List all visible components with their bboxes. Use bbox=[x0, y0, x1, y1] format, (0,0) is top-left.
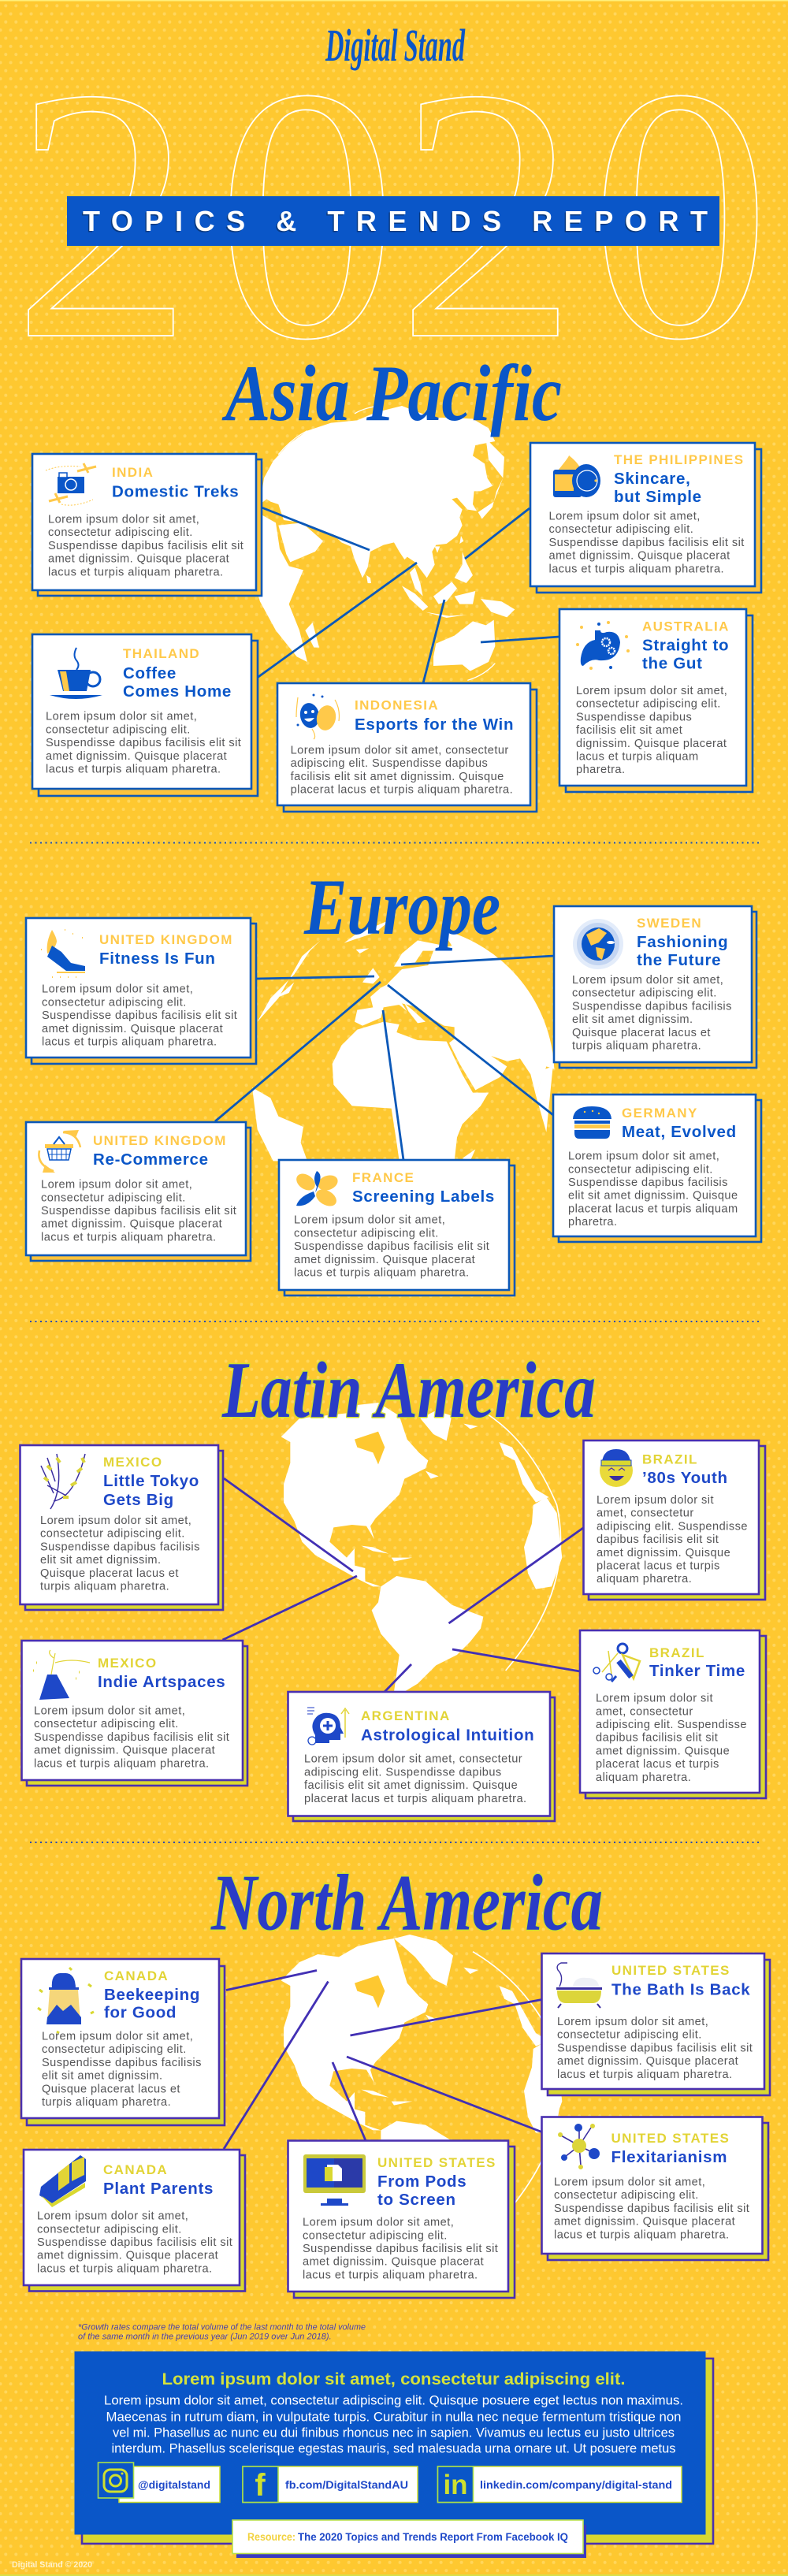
body text: Lorem ipsum dolor sit amet, bbox=[48, 514, 199, 526]
body text: consectetur adipiscing elit. bbox=[548, 523, 693, 536]
body text: Lorem ipsum dolor sit amet, bbox=[40, 1515, 191, 1527]
icon: craft tools bbox=[593, 1644, 640, 1682]
trend title: Coffee bbox=[123, 664, 177, 682]
country label: UNITED STATES bbox=[611, 2131, 730, 2146]
body text: Quisque placerat lacus et bbox=[42, 2083, 180, 2095]
heading: Europe: Europe bbox=[303, 863, 500, 952]
social: Instagram: @digitalstand bbox=[138, 2478, 210, 2491]
body text: Suspendisse dapibus facilisis elit sit bbox=[46, 737, 241, 749]
footer body text: interdum. Phasellus scelerisque egestas mauris, sed malesuada urna ornare ut. Ut posuere metus bbox=[112, 2441, 676, 2456]
trend title: Flexitarianism bbox=[611, 2148, 727, 2166]
panel: Argentina bbox=[288, 1692, 555, 1821]
trend title: Comes Home bbox=[123, 682, 232, 701]
body text: placerat lacus et turpis aliquam pharetra. bbox=[304, 1793, 527, 1805]
body text: Lorem ipsum dolor sit amet, consectetur bbox=[304, 1753, 522, 1766]
body text: Lorem ipsum dolor sit amet, bbox=[568, 1150, 719, 1163]
body text: Quisque placerat lacus et bbox=[572, 1027, 711, 1039]
outlined year 2020: 2020 bbox=[13, 15, 771, 414]
body text: facilisis elit sit amet bbox=[576, 724, 682, 737]
country label: BRAZIL bbox=[642, 1452, 698, 1467]
icon: head with plus sign bbox=[307, 1708, 349, 1745]
social: Facebook: fb.com/DigitalStandAU bbox=[285, 2478, 408, 2491]
footer body text: vel mi. Phasellus ac nunc eu dui finibus rhoncus nec in sapien. Vivamus eu lectus eu justo ultrices bbox=[113, 2425, 675, 2440]
panel: The Philippines bbox=[530, 443, 761, 593]
body text: Lorem ipsum dolor sit amet, consectetur bbox=[291, 744, 509, 756]
body text: amet dignissim. Quisque bbox=[597, 1547, 730, 1559]
trend title: but Simple bbox=[614, 488, 702, 506]
icon: basket with arrows bbox=[39, 1130, 80, 1173]
globe: North America bbox=[281, 1935, 562, 2214]
country label: ARGENTINA bbox=[361, 1708, 451, 1723]
body text: amet dignissim. Quisque placerat bbox=[557, 2055, 738, 2068]
panel: Brazil, '80s Youth bbox=[583, 1440, 765, 1600]
body text: Lorem ipsum dolor sit amet, bbox=[576, 685, 727, 697]
body text: placerat lacus et turpis bbox=[597, 1560, 720, 1573]
country label: MEXICO bbox=[103, 1455, 162, 1470]
trend title: Plant Parents bbox=[103, 2180, 214, 2198]
body text: Quisque placerat lacus et bbox=[40, 1567, 179, 1580]
trend title: for Good bbox=[104, 2003, 177, 2022]
body text: Lorem ipsum dolor sit amet, bbox=[548, 511, 701, 523]
body text: Suspendisse dapibus bbox=[576, 711, 692, 723]
icon: plant branches bbox=[41, 1454, 85, 1509]
body text: Suspendisse dapibus facilisis elit sit bbox=[42, 1009, 237, 1022]
body text: lacus et turpis aliquam pharetra. bbox=[554, 2228, 730, 2241]
body text: pharetra. bbox=[568, 1216, 617, 1229]
icon: desktop monitor bbox=[303, 2154, 366, 2206]
connector lines: Asia Pacific bbox=[256, 507, 559, 683]
body text: placerat lacus et turpis aliquam pharetra. bbox=[291, 783, 513, 796]
body text: Suspendisse dapibus facilisis elit sit bbox=[303, 2243, 498, 2255]
body text: adipiscing elit. Suspendisse bbox=[597, 1520, 748, 1533]
body text: amet dignissim. Quisque placerat bbox=[303, 2256, 484, 2269]
body text: consectetur adipiscing elit. bbox=[37, 2223, 182, 2236]
country label: GERMANY bbox=[622, 1106, 698, 1121]
body text: amet dignissim. Quisque placerat bbox=[294, 1254, 475, 1266]
trend title: Straight to bbox=[642, 637, 729, 654]
panel: United States, From Pods to Screen bbox=[288, 2140, 515, 2298]
body text: lacus et turpis aliquam pharetra. bbox=[303, 2269, 478, 2281]
trend title: Skincare, bbox=[614, 470, 690, 488]
body text: Suspendisse dapibus facilisis elit sit bbox=[554, 2202, 749, 2215]
trend title: Indie Artspaces bbox=[98, 1673, 225, 1691]
body text: amet dignissim. Quisque placerat bbox=[34, 1745, 215, 1757]
body text: dignissim. Quisque placerat bbox=[576, 738, 727, 750]
trend title: Astrological Intuition bbox=[361, 1726, 534, 1745]
body text: consectetur adipiscing elit. bbox=[42, 996, 187, 1009]
body text: amet, consectetur bbox=[596, 1705, 693, 1718]
body text: facilisis elit sit amet dignissim. Quisque bbox=[291, 771, 504, 783]
trend title: ’80s Youth bbox=[642, 1469, 728, 1487]
heading: North America: North America bbox=[210, 1858, 603, 1948]
trend title: Meat, Evolved bbox=[622, 1123, 737, 1141]
body text: Lorem ipsum dolor sit amet, bbox=[42, 983, 193, 996]
body text: amet dignissim. Quisque placerat bbox=[42, 1023, 223, 1035]
panel: France bbox=[279, 1160, 515, 1295]
country label: SWEDEN bbox=[637, 916, 702, 931]
body text: Suspendisse dapibus facilisis elit sit bbox=[34, 1731, 229, 1744]
country label: MEXICO bbox=[98, 1656, 157, 1671]
trend title: Re-Commerce bbox=[93, 1150, 209, 1169]
body text: turpis aliquam pharetra. bbox=[42, 2096, 171, 2109]
country label: THE PHILIPPINES bbox=[614, 452, 745, 467]
body text: facilisis elit sit amet dignissim. Quisque bbox=[304, 1779, 518, 1792]
social: Facebook: f bbox=[255, 2468, 266, 2503]
title banner: TOPICS & TRENDS REPORT bbox=[83, 205, 708, 237]
trend title: Beekeeping bbox=[104, 1986, 200, 2004]
icon: dancer bbox=[33, 1650, 90, 1700]
country label: BRAZIL bbox=[649, 1645, 705, 1660]
heading: Asia Pacific: Asia Pacific bbox=[221, 349, 562, 438]
icon: bathtub bbox=[556, 1963, 602, 2008]
body text: amet dignissim. Quisque placerat bbox=[37, 2250, 218, 2262]
footer panel bbox=[74, 2351, 713, 2558]
icon: running shoe bbox=[41, 930, 85, 977]
body text: turpis aliquam pharetra. bbox=[572, 1040, 701, 1053]
body text: Lorem ipsum dolor sit amet, bbox=[41, 1179, 192, 1191]
icon: flower bbox=[293, 1170, 340, 1210]
body text: consectetur adipiscing elit. bbox=[48, 526, 193, 539]
body text: amet, consectetur bbox=[597, 1507, 694, 1520]
icon: skincare jar bbox=[553, 455, 600, 497]
icon: beekeeper bbox=[38, 1968, 94, 2033]
body text: amet dignissim. Quisque placerat bbox=[548, 550, 730, 563]
trend title: the Future bbox=[637, 951, 721, 969]
body text: lacus et turpis aliquam pharetra. bbox=[34, 1757, 210, 1770]
icon: shelf with plants bbox=[39, 2155, 86, 2207]
trend title: Domestic Treks bbox=[112, 482, 239, 501]
social: LinkedIn bbox=[438, 2466, 682, 2503]
country label: INDIA bbox=[112, 465, 154, 480]
country label: CANADA bbox=[103, 2162, 168, 2177]
body text: amet dignissim. Quisque placerat bbox=[48, 553, 229, 566]
panel: Sweden bbox=[554, 906, 756, 1068]
connector lines: Latin America bbox=[222, 1478, 583, 1692]
body text: lacus et turpis aliquam pharetra. bbox=[294, 1267, 470, 1280]
country label: UNITED KINGDOM bbox=[99, 932, 233, 947]
country label: CANADA bbox=[104, 1968, 169, 1983]
panel: Thailand bbox=[32, 634, 258, 796]
footer body text: Lorem ipsum dolor sit amet, consectetur adipiscing elit. Quisque posuere eget lectus non maximus. bbox=[104, 2393, 683, 2408]
body text: Suspendisse dapibus facilisis elit sit bbox=[48, 540, 243, 552]
body text: Suspendisse dapibus facilisis elit sit bbox=[294, 1240, 489, 1253]
footnote: of the same month in the previous year (Jun 2019 over Jun 2018). bbox=[78, 2333, 332, 2342]
body text: lacus et turpis aliquam pharetra. bbox=[557, 2069, 733, 2081]
body text: Suspendisse dapibus facilisis bbox=[572, 1000, 732, 1013]
panel: India bbox=[32, 454, 262, 596]
icon: globe bbox=[573, 919, 623, 969]
body text: lacus et turpis aliquam pharetra. bbox=[41, 1231, 217, 1243]
body text: elit sit amet dignissim. Quisque bbox=[568, 1190, 738, 1203]
resource box: Resource: bbox=[247, 2531, 296, 2543]
country label: FRANCE bbox=[352, 1170, 414, 1185]
heading: Latin America: Latin America bbox=[221, 1346, 596, 1435]
body text: lacus et turpis aliquam pharetra. bbox=[48, 566, 224, 578]
trend title: Tinker Time bbox=[649, 1662, 745, 1680]
trend title: Esports for the Win bbox=[355, 716, 514, 734]
body text: consectetur adipiscing elit. bbox=[576, 698, 721, 711]
body text: Suspendisse dapibus facilisis elit sit bbox=[41, 1205, 236, 1217]
globe: Asia Pacific bbox=[252, 406, 515, 680]
trend title: Fitness Is Fun bbox=[99, 950, 216, 968]
panel: Brazil, Tinker Time bbox=[580, 1630, 766, 1798]
footer body text: Maecenas in rutrum diam, in vulputate turpis. Curabitur in nulla nec neque fermentum tristique non bbox=[106, 2410, 681, 2425]
body text: Lorem ipsum dolor sit amet, bbox=[294, 1214, 445, 1227]
icon: camera and planes bbox=[46, 463, 96, 505]
body text: consectetur adipiscing elit. bbox=[303, 2229, 448, 2242]
body text: Lorem ipsum dolor sit bbox=[597, 1494, 714, 1507]
body text: lacus et turpis aliquam pharetra. bbox=[37, 2262, 213, 2275]
country label: UNITED STATES bbox=[611, 1963, 730, 1978]
panel: Mexico, Indie Artspaces bbox=[22, 1641, 247, 1786]
icon: burger bbox=[573, 1106, 611, 1139]
trend title: the Gut bbox=[642, 654, 703, 673]
body text: amet dignissim. Quisque bbox=[596, 1745, 730, 1757]
connector lines: North America bbox=[224, 1970, 542, 2149]
trend title: From Pods bbox=[377, 2173, 466, 2191]
icon: theatre masks bbox=[296, 693, 339, 739]
body text: turpis aliquam pharetra. bbox=[40, 1581, 169, 1593]
social: Instagram bbox=[98, 2463, 220, 2503]
icon: coffee cup bbox=[50, 648, 102, 699]
body text: Suspendisse dapibus facilisis bbox=[42, 2057, 202, 2069]
body text: consectetur adipiscing elit. bbox=[554, 2189, 699, 2202]
panel: United Kingdom, Fitness bbox=[26, 918, 256, 1064]
icon: smiling face with cap bbox=[600, 1449, 633, 1487]
footer heading: Lorem ipsum dolor sit amet, consectetur adipiscing elit. bbox=[162, 2370, 626, 2388]
social: LinkedIn: in bbox=[443, 2470, 468, 2500]
body text: elit sit amet dignissim. bbox=[40, 1554, 162, 1567]
trend title: Little Tokyo bbox=[103, 1472, 199, 1490]
body text: adipiscing elit. Suspendisse bbox=[596, 1719, 747, 1731]
social: Facebook bbox=[243, 2466, 418, 2503]
icon: molecule bbox=[558, 2124, 600, 2169]
globe: Latin America bbox=[281, 1403, 562, 1692]
title banner: TOPICS & TRENDS REPORT bbox=[82, 206, 706, 238]
body text: consectetur adipiscing elit. bbox=[42, 2043, 187, 2056]
body text: pharetra. bbox=[576, 764, 625, 776]
panel: Mexico, Little Tokyo bbox=[20, 1445, 223, 1610]
body text: consectetur adipiscing elit. bbox=[41, 1191, 186, 1204]
body text: consectetur adipiscing elit. bbox=[568, 1163, 713, 1176]
resource box: The 2020 Topics and Trends Report From Facebook IQ bbox=[298, 2531, 568, 2543]
title banner bbox=[67, 196, 719, 246]
body text: dapibus facilisis elit sit bbox=[597, 1533, 719, 1546]
body text: Lorem ipsum dolor sit amet, bbox=[572, 974, 723, 987]
panel: Australia bbox=[559, 609, 753, 792]
body text: aliquam pharetra. bbox=[596, 1771, 691, 1784]
body text: lacus et turpis aliquam pharetra. bbox=[548, 563, 724, 575]
body text: Lorem ipsum dolor sit amet, bbox=[303, 2217, 454, 2229]
body text: Lorem ipsum dolor sit bbox=[596, 1693, 713, 1705]
body text: consectetur adipiscing elit. bbox=[34, 1718, 179, 1730]
panel: Indonesia bbox=[277, 683, 537, 812]
body text: amet dignissim. Quisque placerat bbox=[41, 1218, 222, 1231]
trend title: Screening Labels bbox=[352, 1188, 495, 1206]
panel: United States, Flexitarianism bbox=[542, 2117, 768, 2260]
body text: lacus et turpis aliquam pharetra. bbox=[46, 763, 221, 775]
body text: aliquam pharetra. bbox=[597, 1573, 692, 1585]
panel: Canada, Plant Parents bbox=[24, 2150, 245, 2292]
logo: Digital Stand bbox=[325, 20, 466, 71]
trend title: Fashioning bbox=[637, 933, 728, 951]
body text: lacus et turpis aliquam pharetra. bbox=[42, 1035, 217, 1048]
country label: AUSTRALIA bbox=[642, 619, 730, 634]
copyright: Digital Stand © 2020 bbox=[12, 2560, 92, 2570]
body text: consectetur adipiscing elit. bbox=[294, 1227, 439, 1240]
body text: Lorem ipsum dolor sit amet, bbox=[46, 711, 197, 723]
trend title: The Bath Is Back bbox=[611, 1981, 750, 1998]
icon: stomach with gears bbox=[576, 621, 630, 670]
body text: Lorem ipsum dolor sit amet, bbox=[554, 2176, 705, 2189]
body text: Lorem ipsum dolor sit amet, bbox=[557, 2016, 708, 2028]
body text: Lorem ipsum dolor sit amet, bbox=[37, 2210, 188, 2223]
body text: lacus et turpis aliquam bbox=[576, 750, 699, 763]
body text: elit sit amet dignissim. bbox=[42, 2070, 163, 2083]
body text: consectetur adipiscing elit. bbox=[40, 1528, 185, 1541]
panel: Canada, Beekeeping bbox=[21, 1959, 225, 2125]
connector lines: Europe bbox=[215, 956, 554, 1160]
body text: Lorem ipsum dolor sit amet, bbox=[34, 1705, 185, 1718]
body text: amet dignissim. Quisque placerat bbox=[46, 750, 227, 763]
body text: Suspendisse dapibus facilisis bbox=[568, 1176, 728, 1189]
country label: INDONESIA bbox=[355, 698, 439, 712]
body text: Suspendisse dapibus facilisis elit sit bbox=[37, 2236, 232, 2249]
globe: Europe bbox=[252, 920, 554, 1161]
body text: adipiscing elit. Suspendisse dapibus bbox=[304, 1766, 502, 1779]
country label: THAILAND bbox=[123, 646, 200, 661]
body text: Suspendisse dapibus facilisis elit sit bbox=[557, 2042, 753, 2054]
country label: UNITED STATES bbox=[377, 2155, 496, 2170]
body text: placerat lacus et turpis bbox=[596, 1758, 719, 1771]
panel: Germany bbox=[553, 1095, 761, 1242]
body text: Suspendisse dapibus facilisis elit sit bbox=[548, 537, 745, 549]
body text: elit sit amet dignissim. bbox=[572, 1013, 693, 1026]
body text: Suspendisse dapibus facilisis bbox=[40, 1541, 200, 1553]
trend title: Gets Big bbox=[103, 1491, 174, 1509]
body text: dapibus facilisis elit sit bbox=[596, 1732, 718, 1745]
panel: United Kingdom, Re-Commerce bbox=[26, 1122, 251, 1261]
body text: adipiscing elit. Suspendisse dapibus bbox=[291, 757, 488, 770]
body text: placerat lacus et turpis aliquam bbox=[568, 1203, 738, 1215]
panel: United States, The Bath Is Back bbox=[542, 1953, 770, 2095]
body text: consectetur adipiscing elit. bbox=[557, 2029, 702, 2042]
body text: consectetur adipiscing elit. bbox=[46, 723, 191, 736]
country label: UNITED KINGDOM bbox=[93, 1133, 227, 1148]
body text: amet dignissim. Quisque placerat bbox=[554, 2216, 735, 2228]
body text: consectetur adipiscing elit. bbox=[572, 987, 717, 1000]
social: LinkedIn: linkedin.com/company/digital-stand bbox=[480, 2478, 672, 2491]
resource box bbox=[232, 2520, 586, 2558]
trend title: to Screen bbox=[377, 2191, 456, 2209]
footnote: *Growth rates compare the total volume of the last month to the total volume bbox=[78, 2323, 366, 2333]
body text: Lorem ipsum dolor sit amet, bbox=[42, 2030, 193, 2043]
